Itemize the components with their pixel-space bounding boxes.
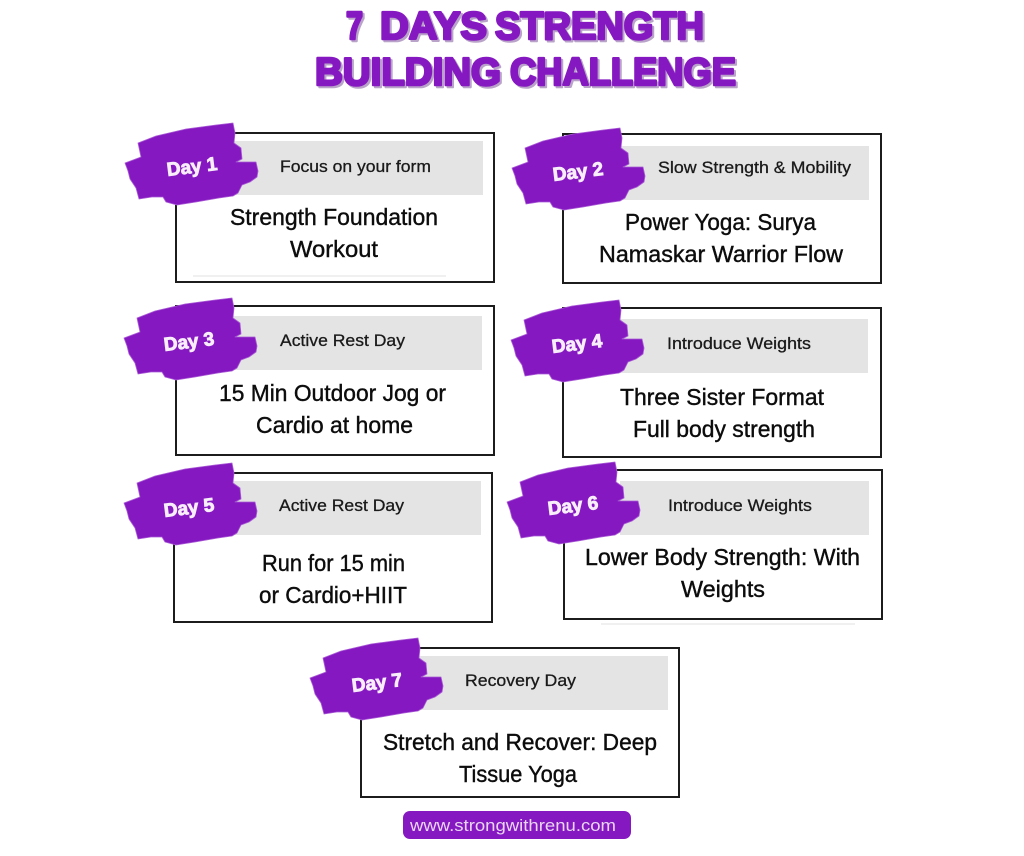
day 5 workout: or Cardio+HIIT — [259, 582, 407, 608]
day 5 workout — [259, 550, 407, 608]
title: DAYS — [380, 5, 487, 48]
day 3 workout — [219, 380, 446, 438]
day 1 workout: Workout — [290, 236, 379, 262]
day 1 subtitle: Focus on your form — [280, 157, 431, 176]
day 2 workout: Power Yoga: Surya — [625, 209, 816, 235]
day 6 badge — [507, 462, 640, 544]
day 1 badge: Day 1 — [166, 154, 219, 181]
day 2 subtitle: Slow Strength & Mobility — [658, 158, 852, 177]
day 7 badge — [310, 638, 443, 720]
panel: day 4 — [511, 300, 881, 457]
day 3 workout: Cardio at home — [256, 412, 413, 438]
title: CHALLENGE — [510, 51, 736, 94]
panel: day 6 — [507, 462, 882, 624]
day 4 subtitle: Introduce Weights — [667, 334, 811, 353]
day 4 workout: Full body strength — [633, 416, 815, 442]
day 2 badge: Day 2 — [552, 159, 605, 186]
title: BUILDING — [317, 53, 503, 96]
title: 7 — [346, 5, 363, 48]
day 2 workout: Namaskar Warrior Flow — [599, 241, 843, 267]
panel: day 2 — [512, 128, 881, 283]
day 5 subtitle: Active Rest Day — [279, 496, 405, 515]
day 6 workout: Weights — [681, 576, 765, 602]
day 4 workout — [620, 384, 825, 442]
title: DAYS — [382, 7, 489, 50]
title: 7 — [348, 7, 365, 50]
day 3 badge — [124, 298, 257, 380]
day 7 subtitle: Recovery Day — [465, 671, 577, 690]
day 5 workout: Run for 15 min — [262, 550, 405, 576]
day 2 badge — [512, 128, 645, 210]
day 5 badge: Day 5 — [163, 495, 216, 522]
day 1 workout: Strength Foundation — [230, 204, 438, 230]
day 1 workout — [230, 204, 438, 262]
title: STRENGTH — [495, 5, 704, 48]
day 7 badge: Day 7 — [351, 670, 404, 697]
day 3 subtitle: Active Rest Day — [280, 331, 406, 350]
day 4 workout: Three Sister Format — [620, 384, 825, 410]
day 5 badge — [124, 463, 257, 545]
panel: day 5 — [124, 463, 492, 622]
day 7 workout — [383, 729, 657, 787]
website badge — [403, 811, 631, 839]
day 6 badge: Day 6 — [547, 493, 600, 520]
panel: day 7 — [310, 638, 679, 797]
day 3 badge: Day 3 — [163, 329, 216, 356]
title: BUILDING — [315, 51, 501, 94]
title — [315, 5, 738, 96]
day 4 badge — [511, 300, 644, 382]
day 1 badge — [125, 123, 258, 205]
title: STRENGTH — [497, 7, 706, 50]
day 7 workout: Tissue Yoga — [459, 761, 577, 787]
day 3 workout: 15 Min Outdoor Jog or — [219, 380, 446, 406]
day 6 subtitle: Introduce Weights — [668, 496, 812, 515]
day 6 workout: Lower Body Strength: With — [585, 544, 860, 570]
day 6 workout — [585, 544, 860, 602]
website badge: www.strongwithrenu.com — [409, 816, 616, 835]
panel: day 3 — [124, 298, 494, 455]
day 4 badge: Day 4 — [551, 331, 604, 358]
title: CHALLENGE — [512, 53, 738, 96]
panel: day 1 — [125, 123, 494, 282]
day 7 workout: Stretch and Recover: Deep — [383, 729, 657, 755]
day 2 workout — [599, 209, 843, 267]
